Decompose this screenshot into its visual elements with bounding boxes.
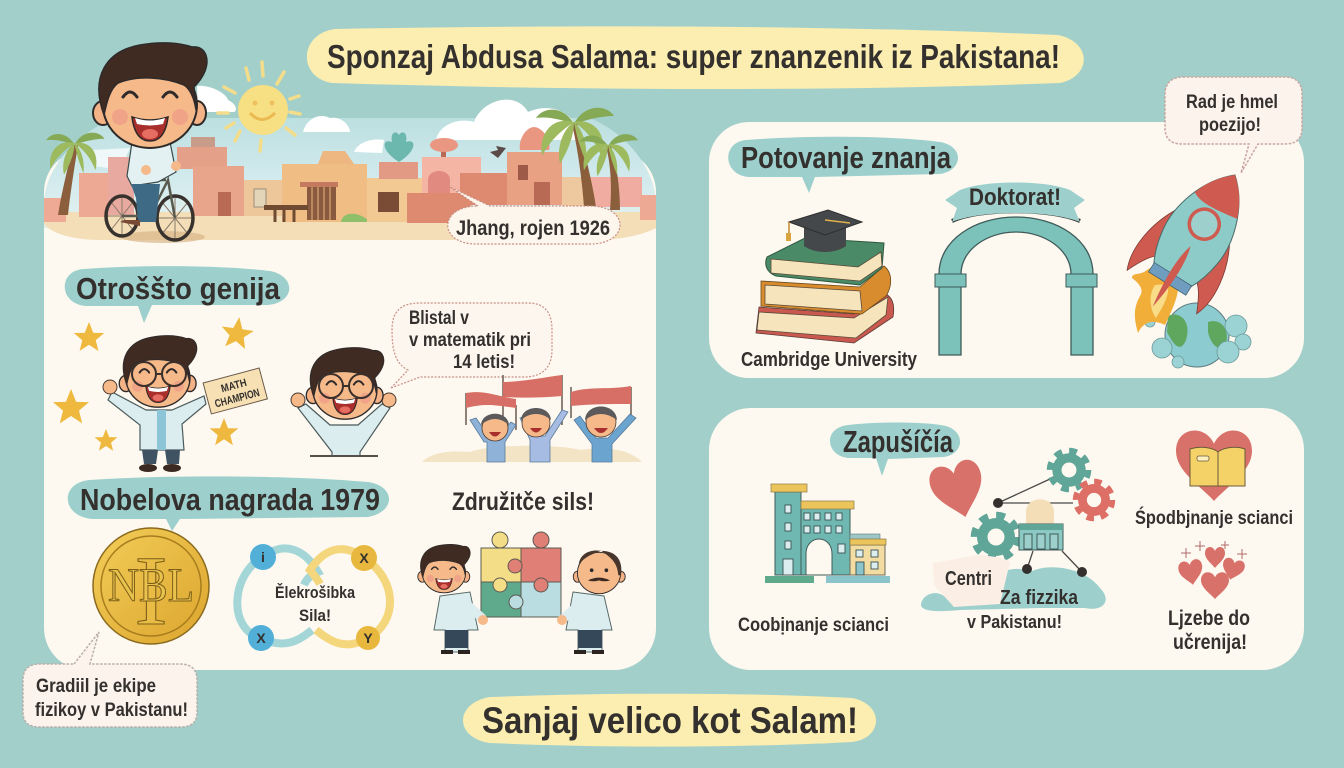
sign: math champion: MATH	[220, 377, 248, 395]
icon: gold medal	[93, 528, 209, 646]
icon: gold medal: NBL	[108, 559, 194, 612]
icon: electroweak loops: Sila!	[299, 606, 331, 625]
sign: math champion	[203, 368, 267, 414]
panel: childhood and nobel	[44, 43, 656, 670]
callout: math at fourteen: v matematik pri	[409, 330, 531, 351]
label: encouraging science: Śpodbjnanje scianci	[1135, 507, 1293, 529]
callout: built physics teams	[23, 632, 197, 727]
heading: nobel prize: Nobelova nagrada 1979	[80, 482, 380, 517]
icon: boy on bicycle	[93, 43, 207, 243]
heading: nobel prize	[68, 476, 389, 531]
label: physics centre: Centri	[945, 568, 992, 590]
icon: doctorate arch	[935, 182, 1097, 355]
icon: network of gears and observatory	[921, 451, 1112, 611]
icon: electroweak loops	[237, 544, 390, 651]
heading: legacy	[830, 422, 960, 476]
label: love of learning: Ljzebe do	[1168, 607, 1250, 630]
icon: electroweak loops: X	[256, 630, 266, 646]
icon: electroweak loops: i	[261, 549, 265, 565]
icon: electroweak loops: X	[359, 550, 369, 566]
callout: birthplace: Jhang, rojen 1926	[456, 217, 610, 240]
closing slogan: Sanjaj velico kot Salam!	[482, 700, 858, 741]
icon: hearts with sparkles	[1177, 541, 1247, 599]
title	[307, 26, 1084, 89]
icon: doctorate arch: Doktorat!	[969, 184, 1061, 211]
panel: journey of knowledge	[709, 122, 1304, 378]
icon: university building	[765, 484, 890, 583]
icon: boy cheering	[291, 348, 396, 456]
callout: math at fourteen: Blistal v	[409, 308, 469, 329]
label: combining: Coobịnanje scianci	[738, 615, 889, 636]
callout: built physics teams: Gradiil je ekipe	[36, 676, 156, 697]
icon: sun	[218, 62, 300, 151]
icon: heart	[926, 457, 991, 524]
heading: childhood	[65, 266, 289, 323]
label: love of learning	[1168, 607, 1250, 654]
title: Sponzaj Abdusa Salama: super znanzenik iz Pakistana!	[327, 38, 1060, 75]
callout: work is poetry: poezijo!	[1199, 115, 1261, 136]
icon: scientists with puzzle	[418, 532, 625, 654]
icon: palm trees	[46, 108, 638, 215]
icon: children with flags	[422, 375, 642, 462]
heading: journey: Potovanje znanja	[741, 140, 952, 175]
panel: legacy	[709, 408, 1304, 670]
icon: heart with book	[1176, 430, 1252, 501]
label: physics centre: Za fizzika	[1000, 587, 1079, 609]
callout: birthplace	[448, 187, 620, 244]
heading: legacy: Zapušíčía	[843, 424, 954, 459]
label: physics centre: v Pakistanu!	[967, 612, 1062, 632]
callout: work is poetry	[1165, 77, 1302, 173]
heading: join forces: Združitče sils!	[452, 488, 594, 516]
label: cambridge: Cambridge University	[741, 349, 918, 371]
icon: rocket and globe	[1114, 151, 1274, 368]
heading: childhood: Otroššto genija	[76, 271, 281, 306]
icon: gold medal: I	[134, 535, 168, 646]
callout: math at fourteen	[391, 303, 552, 388]
icon: boy with math champion sign	[103, 336, 267, 472]
heading: journey	[728, 137, 958, 193]
sign: math champion: CHAMPION	[214, 387, 261, 410]
icon: electroweak loops: Y	[363, 630, 373, 646]
village scene	[44, 86, 656, 240]
label: physics centre	[933, 555, 1079, 632]
puzzle	[481, 532, 561, 617]
icon: electroweak loops: Ělekrošibka	[275, 583, 355, 602]
icon: stars	[53, 315, 255, 451]
callout: work is poetry: Rad je hmel	[1186, 92, 1278, 113]
callout: math at fourteen: 14 letis!	[453, 352, 515, 373]
label: love of learning: učrenija!	[1173, 631, 1247, 654]
icon: stack of books with cap	[756, 210, 894, 343]
callout: built physics teams: fizikoy v Pakistanu!	[35, 700, 188, 721]
